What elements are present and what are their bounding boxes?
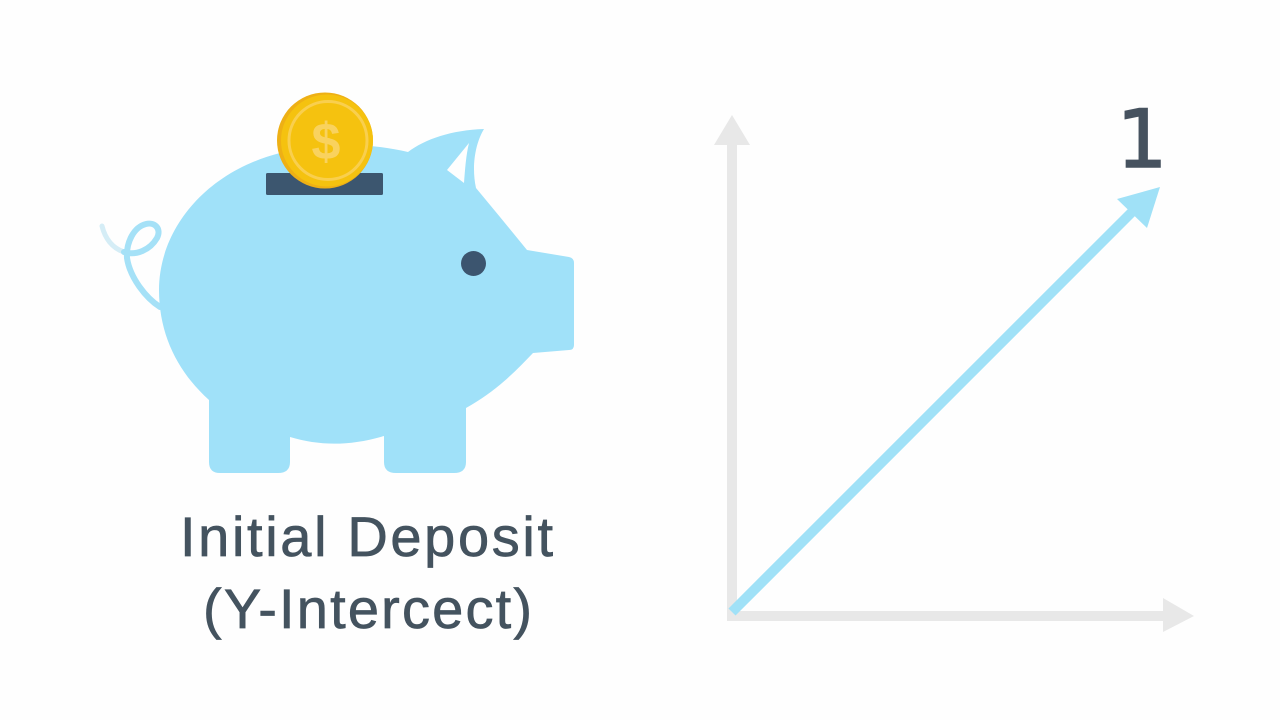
icon: piggy bank bbox=[102, 92, 574, 473]
heading: y-intercept: (Y-Intercect) bbox=[203, 577, 532, 640]
icon: gold coin bbox=[277, 92, 373, 188]
heading: initial deposit: Initial Deposit bbox=[180, 505, 553, 568]
pig eye bbox=[461, 251, 486, 276]
y axis arrowhead bbox=[714, 115, 750, 145]
x axis bbox=[727, 611, 1166, 621]
dollar sign: $ bbox=[312, 113, 341, 171]
pig ear inner bbox=[447, 143, 469, 183]
coin edge bbox=[277, 92, 373, 188]
pig body bbox=[159, 129, 574, 473]
y axis bbox=[727, 144, 737, 616]
pig tail bbox=[102, 224, 160, 307]
coin ring bbox=[289, 102, 367, 180]
chart: axes and slope line bbox=[714, 115, 1194, 632]
x axis arrowhead bbox=[1163, 598, 1194, 632]
slope line bbox=[732, 212, 1132, 612]
label: slope value: 1 bbox=[1117, 93, 1167, 186]
coin slot bbox=[266, 173, 383, 195]
slope arrowhead bbox=[1117, 187, 1160, 228]
coin face bbox=[281, 94, 373, 186]
